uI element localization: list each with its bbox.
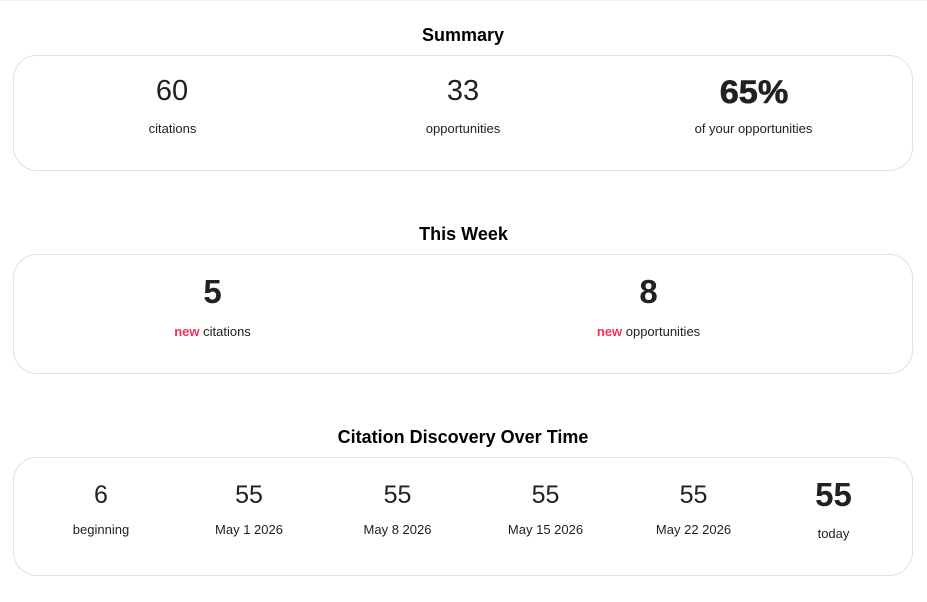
top edge line xyxy=(0,0,927,1)
stat: new citations: 5 xyxy=(203,273,222,310)
heading: summary: Summary xyxy=(422,25,504,45)
stat: percent of opportunities xyxy=(695,74,812,136)
stat: opportunities: 33 xyxy=(447,75,479,107)
stat: citations xyxy=(149,75,196,136)
panel: this week xyxy=(13,254,913,374)
timeline stat: beginning xyxy=(73,481,129,537)
timeline stat: May 15 2026 xyxy=(508,481,583,537)
stat: citations: citations xyxy=(149,121,196,136)
timeline stat: May 1 2026 xyxy=(215,481,283,537)
stat: percent of opportunities: of your opportunities xyxy=(695,121,812,136)
timeline stat: May 22 2026: May 22 2026 xyxy=(656,522,731,537)
stat: new citations: new citations xyxy=(174,324,251,339)
timeline stat: today xyxy=(815,476,852,541)
timeline stat: May 1 2026: May 1 2026 xyxy=(215,522,283,537)
timeline stat: May 8 2026: 55 xyxy=(384,481,411,509)
timeline stat: May 15 2026: 55 xyxy=(532,481,559,509)
timeline stat: beginning: 6 xyxy=(94,481,108,509)
stat: citations: 60 xyxy=(156,75,188,107)
timeline stat: beginning: beginning xyxy=(73,522,129,537)
timeline stat: today: 55 xyxy=(815,476,852,513)
stat: new opportunities xyxy=(597,273,700,339)
heading: this week: This Week xyxy=(419,224,508,244)
stat: new opportunities: 8 xyxy=(639,273,658,310)
stat: percent of opportunities: 65% xyxy=(719,74,788,110)
panel: summary xyxy=(13,55,913,171)
timeline stat: May 22 2026 xyxy=(656,481,731,537)
timeline stat: May 8 2026: May 8 2026 xyxy=(364,522,431,537)
timeline stat: May 15 2026: May 15 2026 xyxy=(508,522,583,537)
timeline stat: May 22 2026: 55 xyxy=(680,481,707,509)
stat: opportunities xyxy=(426,75,500,136)
stat: new citations xyxy=(174,273,251,339)
timeline stat: today: today xyxy=(818,526,849,541)
timeline stat: May 8 2026 xyxy=(364,481,431,537)
panel: citation discovery over time xyxy=(13,457,913,576)
stat: opportunities: opportunities xyxy=(426,121,500,136)
heading: citation discovery over time: Citation Discovery Over Time xyxy=(338,427,588,447)
stat: new opportunities: new opportunities xyxy=(597,324,700,339)
timeline stat: May 1 2026: 55 xyxy=(235,481,263,509)
